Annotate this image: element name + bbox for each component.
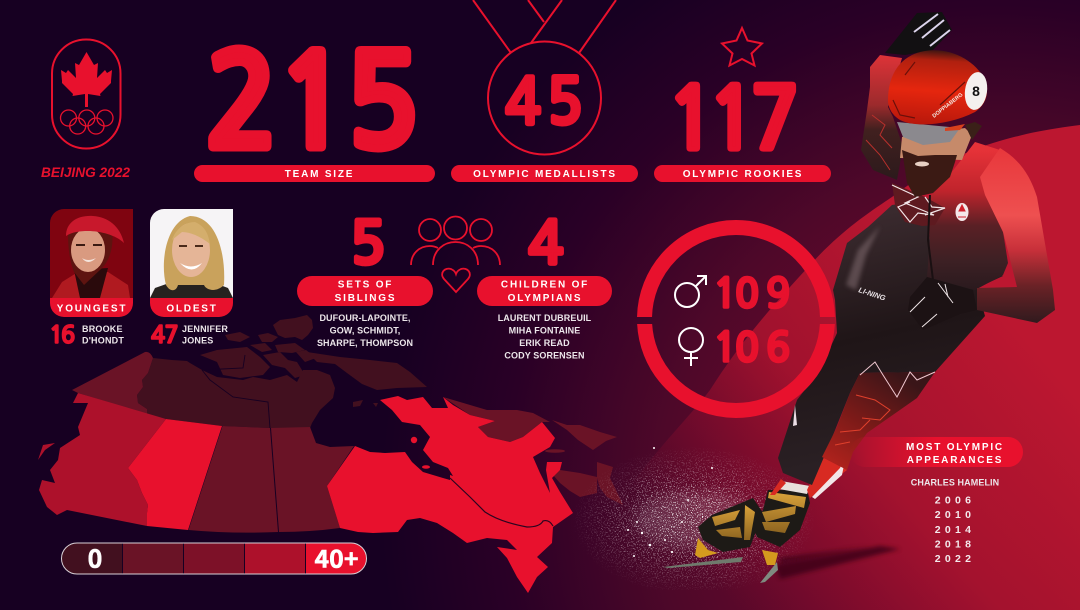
- region: Yukon: [72, 352, 153, 414]
- Beijing 2022 wordmark: BEIJING 2022: [41, 165, 130, 180]
- region: arctic archipelago: [200, 315, 427, 407]
- stat: children of olympians: ERIK READ: [519, 338, 570, 348]
- callout: most olympic appearances: 2022: [935, 553, 975, 565]
- stat: olympic medallists with medal icon: OLYMPIC MEDALLISTS: [473, 169, 617, 180]
- stat: olympic rookies with star icon: 117: [667, 78, 800, 162]
- stat: sets of siblings: GOW, SCHMIDT,: [330, 326, 400, 336]
- thigh highlight: [846, 226, 880, 290]
- region: Newfoundland: [552, 420, 617, 450]
- stat: sets of siblings: SIBLINGS: [335, 293, 396, 304]
- face: [900, 128, 972, 160]
- icon: maple leaf: [61, 52, 112, 107]
- callout: most olympic appearances: CHARLES HAMELIN: [911, 478, 999, 488]
- region: British Columbia: [38, 393, 166, 526]
- team badge: [956, 203, 968, 221]
- stat: olympic rookies with star icon: OLYMPIC ROOKIES: [683, 169, 803, 180]
- card: oldest athlete: JONES: [182, 336, 214, 346]
- gender split ring: 109: [713, 274, 790, 314]
- region: Labrador: [443, 397, 550, 442]
- LI-NING wordmark: LI-NING: [857, 285, 887, 303]
- photo: Brooke D'Hondt: [50, 209, 133, 298]
- stat: children of olympians: 4: [528, 214, 564, 273]
- mouth: [915, 162, 929, 166]
- front glove: [908, 277, 977, 330]
- raised arm: [861, 55, 903, 180]
- card: oldest athlete: [150, 209, 233, 347]
- skater: Charles Hamelin: [663, 12, 1055, 583]
- helmet: [888, 50, 987, 124]
- region: James Bay islands: [411, 437, 430, 469]
- callout: most olympic appearances: 2014: [935, 524, 975, 536]
- callout: most olympic appearances: 2006: [935, 494, 975, 506]
- stat: team size: TEAM SIZE: [285, 169, 354, 180]
- stat: sets of siblings: SHARPE, THOMPSON: [317, 338, 413, 348]
- sleeve maple pattern: [866, 115, 892, 170]
- zipper: [928, 195, 933, 280]
- stat: sets of siblings: DUFOUR-LAPOINTE,: [319, 313, 411, 323]
- sock: [779, 481, 810, 494]
- legend: athlete count scale: [62, 540, 366, 576]
- leg maple pattern: [835, 395, 890, 445]
- photo: Jennifer Jones: [150, 209, 233, 298]
- helmet wordmark: DOPPIABERG: [932, 92, 964, 120]
- stat: children of olympians: LAURENT DUBREUIL: [498, 313, 592, 323]
- dark body and thigh: [778, 200, 1003, 485]
- lower leg red: [807, 457, 847, 498]
- stat: sets of siblings: 5: [350, 214, 386, 273]
- helmet vent lines: [893, 62, 965, 118]
- icon: family group with heart: [411, 216, 500, 292]
- stat: sets of siblings: [297, 214, 433, 348]
- stat: children of olympians: CHILDREN OF: [501, 280, 589, 290]
- icon: male symbol: [675, 276, 706, 307]
- chest red panel: [892, 183, 945, 226]
- region: Cape Breton: [597, 462, 623, 505]
- raised glove: [885, 12, 952, 55]
- card: youngest athlete: YOUNGEST: [57, 304, 127, 314]
- region: Manitoba: [271, 427, 354, 532]
- region: Prince Edward Island: [545, 449, 565, 453]
- card: oldest athlete: OLDEST: [166, 304, 218, 314]
- white stripe on lower leg: [812, 455, 846, 499]
- stat: olympic medallists with medal icon: 45: [505, 72, 583, 134]
- stat: team size: 215: [205, 39, 419, 166]
- card: oldest athlete: JENNIFER: [182, 324, 228, 334]
- red patterned leg: [822, 372, 935, 470]
- icon: medal: [473, 0, 616, 154]
- gender split ring: 106: [713, 328, 790, 368]
- callout: most olympic appearances: 2018: [935, 538, 975, 550]
- icon: star: [722, 28, 762, 66]
- card: oldest athlete: 47: [151, 323, 179, 347]
- stat: children of olympians: [477, 214, 612, 360]
- region: Northwest Territories and Nunavut: [137, 358, 335, 428]
- region: Saskatchewan: [188, 426, 278, 533]
- callout: most olympic appearances: 2010: [935, 509, 975, 521]
- ear hair: [965, 122, 982, 140]
- region: Alberta: [128, 419, 222, 530]
- helmet number disc: 8: [972, 83, 980, 99]
- icon: female symbol: [679, 328, 703, 366]
- white side stripe: [793, 405, 797, 426]
- callout: most olympic appearances: [850, 437, 1023, 565]
- region: Nunavut border: [202, 355, 270, 428]
- leg maple outline: [860, 362, 935, 397]
- chest maple outline: [892, 185, 945, 222]
- stat: children of olympians: CODY SORENSEN: [504, 350, 585, 360]
- card: youngest athlete: BROOKE: [82, 324, 123, 334]
- stat: olympic medallists with medal icon: [451, 0, 638, 182]
- region: Ontario and Quebec: [327, 396, 573, 593]
- gender split ring: [644, 228, 828, 410]
- goggles: [897, 122, 960, 145]
- legend: athlete count scale: 0: [88, 540, 102, 576]
- callout: most olympic appearances: APPEARANCES: [907, 455, 1003, 466]
- card: youngest athlete: [49, 209, 133, 347]
- stat: sets of siblings: SETS OF: [338, 280, 393, 290]
- front skate: [753, 490, 810, 583]
- region: Nova Scotia and New Brunswick: [553, 470, 597, 497]
- callout: most olympic appearances: MOST OLYMPIC: [906, 442, 1004, 453]
- stat: olympic rookies with star icon: [654, 28, 831, 182]
- logo: Canadian Olympic Team: [41, 40, 130, 180]
- map of Canada by athlete count: [38, 315, 623, 593]
- ice spray: [576, 447, 810, 590]
- jersey torso: [925, 142, 1008, 290]
- icon: olympic rings: [60, 110, 113, 134]
- jersey sleeve: [977, 148, 1055, 323]
- shadows on ice: [775, 546, 900, 579]
- beard: [902, 150, 957, 197]
- card: youngest athlete: D'HONDT: [82, 336, 124, 346]
- stat: children of olympians: MIHA FONTAINE: [509, 326, 580, 336]
- legend: athlete count scale: 40+: [314, 540, 358, 574]
- card: youngest athlete: 16: [49, 323, 75, 347]
- stat: children of olympians: OLYMPIANS: [508, 293, 582, 304]
- region: Ontario-Quebec border: [450, 478, 553, 527]
- helmet number disc: [962, 71, 990, 111]
- back skate: [663, 498, 763, 568]
